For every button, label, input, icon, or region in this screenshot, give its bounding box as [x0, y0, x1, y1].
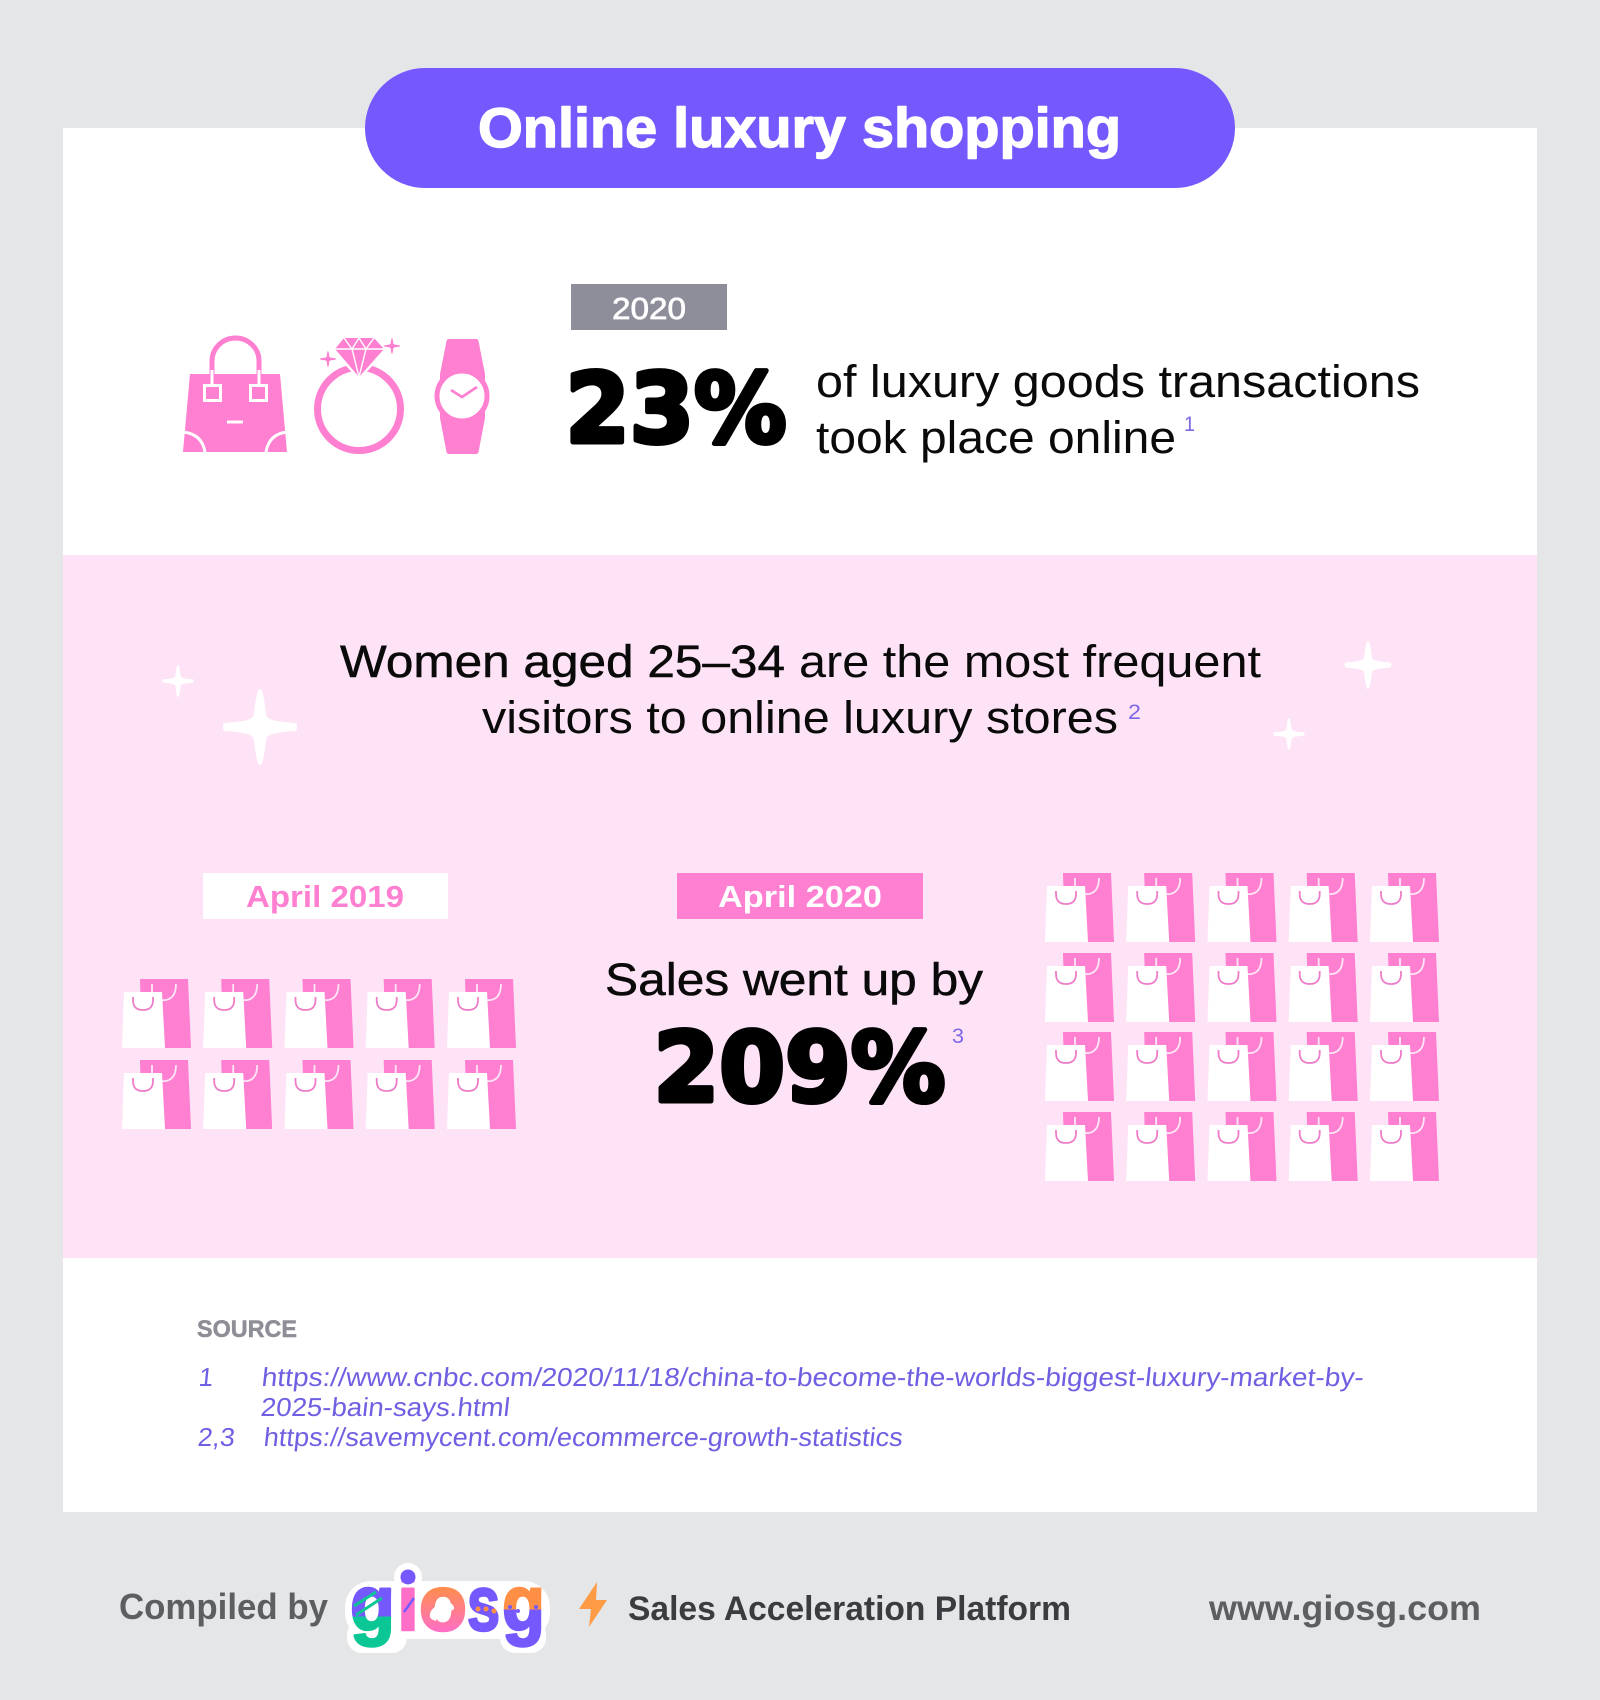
heading: women aged 25-34: Women aged 25–34	[340, 636, 785, 687]
label April 2019	[203, 873, 448, 919]
logo: giosg	[345, 1559, 550, 1653]
source list: 2025-bain-says.html	[259, 1392, 512, 1422]
sparkles left	[162, 665, 297, 765]
icon: handbag	[183, 338, 287, 452]
stat: 23%: 23%	[566, 353, 786, 465]
label April 2020	[677, 873, 923, 919]
label April 2019: April 2019	[246, 879, 404, 914]
footnote 3: 3	[952, 1025, 964, 1048]
icon: wristwatch	[437, 339, 487, 454]
white card	[63, 128, 1537, 1512]
pink panel	[63, 555, 1537, 1258]
year tag 2020	[571, 284, 727, 330]
sales text: Sales went up by	[605, 954, 984, 1005]
sources	[196, 1316, 1366, 1452]
logo: giosg: i	[397, 1559, 419, 1647]
footer: compiled by: Compiled by	[119, 1586, 328, 1627]
source list: 1	[197, 1362, 215, 1392]
bag grid: April 2020	[1045, 873, 1439, 1181]
label April 2020: April 2020	[718, 879, 882, 914]
footnote 2: 2	[1128, 701, 1141, 724]
sources heading: SOURCE	[197, 1316, 297, 1343]
icon: lightning bolt	[579, 1582, 607, 1627]
heading: women aged 25-34: are the most frequent	[799, 636, 1262, 687]
sparkles right	[1273, 641, 1391, 750]
logo: giosg: s	[467, 1559, 500, 1647]
stat description: took place online	[816, 412, 1176, 463]
title pill	[365, 68, 1235, 188]
bag grid: April 2019	[122, 979, 516, 1129]
source list: https://savemycent.com/ecommerce-growth-statistics	[262, 1422, 905, 1452]
stat description	[816, 356, 1420, 463]
tagline: Sales Acceleration Platform	[628, 1590, 1071, 1628]
heading: women aged 25-34: visitors to online luxury stores	[482, 692, 1118, 743]
title: Online luxury shopping	[478, 96, 1121, 159]
source list: 2,3	[196, 1422, 237, 1452]
stat description: of luxury goods transactions	[816, 356, 1420, 407]
logo: giosg: g	[502, 1559, 545, 1647]
icon: diamond ring	[318, 338, 400, 450]
source list: https://www.cnbc.com/2020/11/18/china-to-become-the-worlds-biggest-luxury-market-by-	[260, 1362, 1366, 1392]
logo: giosg: o	[419, 1559, 467, 1647]
stat: 209%: 209%	[654, 1012, 946, 1124]
logo: giosg: g	[350, 1559, 395, 1647]
source list	[196, 1362, 1366, 1452]
website: www.giosg.com	[1208, 1589, 1481, 1628]
footnote 1: 1	[1184, 413, 1195, 436]
year tag 2020: 2020	[612, 291, 686, 326]
heading: women aged 25-34	[340, 636, 1262, 743]
